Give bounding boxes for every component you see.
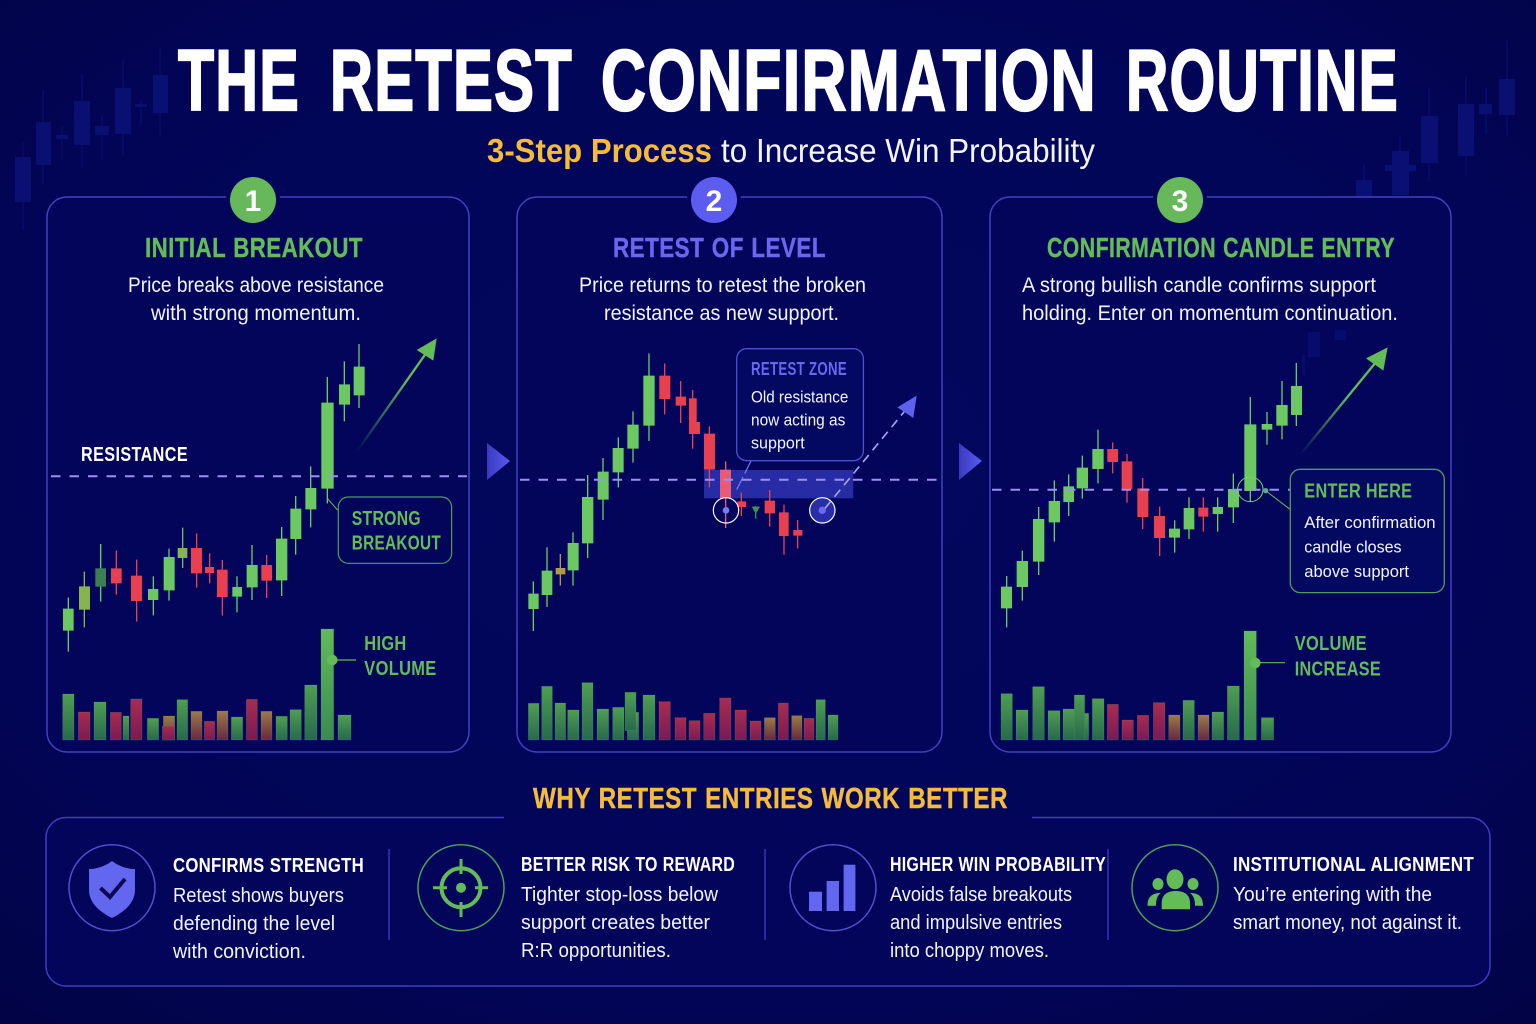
panel: step 1 initial breakout (47, 173, 469, 752)
benefit: institutional alignment: INSTITUTIONAL ALIGNMENT (1233, 854, 1474, 876)
candlestick chart (63, 344, 365, 652)
callout: strong breakout: STRONG (352, 508, 421, 530)
background candles right (1356, 41, 1515, 220)
callout: retest zone (736, 349, 863, 491)
badge 1 (226, 173, 280, 227)
volume bars (63, 629, 351, 740)
arrow: step 2 to 3 (959, 443, 982, 480)
high volume marker: HIGH (364, 633, 407, 655)
high volume marker (327, 633, 437, 680)
benefit: confirms strength (172, 855, 364, 963)
badge 1: 1 (245, 185, 261, 218)
description: with strong momentum. (150, 302, 361, 325)
arrow: up (357, 338, 437, 452)
high volume marker: VOLUME (364, 658, 437, 680)
panel: why retest entries work better (46, 783, 1490, 986)
support line (992, 489, 1290, 491)
volume bars (528, 683, 838, 740)
callout: enter here (1290, 469, 1444, 593)
callout: enter here: After confirmation (1304, 514, 1436, 532)
benefit: confirms strength: defending the level (173, 913, 335, 935)
callout: enter here: ENTER HERE (1304, 480, 1412, 502)
heading: INITIAL BREAKOUT (145, 232, 363, 263)
volume increase marker (1250, 633, 1381, 680)
benefit: institutional alignment: You’re entering with the (1233, 884, 1432, 906)
description: Price breaks above resistance (128, 274, 384, 297)
badge 3: 3 (1172, 185, 1188, 218)
callout: retest zone: Old resistance (751, 389, 848, 407)
arrow: up (1300, 347, 1388, 455)
benefit: higher win probability: into choppy moves. (890, 940, 1049, 962)
badge 2: 2 (706, 185, 722, 218)
arrow: dashed projection (825, 396, 917, 508)
badge 3 (1153, 173, 1207, 227)
candlestick chart (1001, 363, 1302, 627)
description: Price returns to retest the broken (579, 274, 866, 297)
resistance line (51, 475, 467, 477)
panel: step 3 confirmation candle entry (990, 173, 1451, 752)
divider lines (389, 849, 1108, 940)
callout: strong breakout (327, 497, 452, 563)
resistance label: RESISTANCE (81, 444, 188, 466)
retest markers (713, 498, 835, 523)
icon: shield (69, 845, 155, 931)
volume bars (1001, 631, 1274, 740)
badge 2 (687, 173, 741, 227)
icon: people (1132, 845, 1218, 931)
benefit: higher win probability: and impulsive entries (890, 912, 1062, 934)
title: RETEST (330, 33, 573, 129)
retest zone band (704, 470, 853, 498)
benefit: confirms strength: with conviction. (172, 941, 306, 963)
benefit: higher win probability: Avoids false breakouts (890, 884, 1072, 906)
callout: enter here: candle closes (1304, 539, 1402, 557)
benefit: confirms strength: CONFIRMS STRENGTH (173, 855, 364, 877)
benefit: institutional alignment (1233, 854, 1474, 934)
entry marker (1238, 477, 1290, 509)
title: CONFIRMATION (601, 33, 1097, 129)
subtitle: to Increase Win Probability (721, 132, 1095, 169)
volume increase marker: INCREASE (1295, 658, 1381, 680)
callout: retest zone: support (751, 434, 805, 452)
description (128, 274, 384, 325)
benefit: institutional alignment: smart money, not against it. (1233, 912, 1462, 934)
benefit: better risk to reward: BETTER RISK TO REWARD (521, 854, 735, 876)
panel: step 2 retest of level (517, 173, 942, 752)
callout: retest zone: RETEST ZONE (751, 359, 847, 379)
section heading: WHY RETEST ENTRIES WORK BETTER (533, 783, 1008, 815)
volume increase marker: VOLUME (1295, 633, 1367, 655)
icon: bar chart (790, 845, 876, 931)
benefit: higher win probability: HIGHER WIN PROBABILITY (890, 854, 1106, 876)
callout: strong breakout: BREAKOUT (352, 532, 441, 554)
title (178, 33, 1399, 129)
arrow: step 1 to 2 (487, 443, 510, 480)
candlestick chart (528, 353, 802, 631)
benefit: better risk to reward (521, 854, 735, 962)
description: A strong bullish candle confirms support (1022, 274, 1376, 297)
description: holding. Enter on momentum continuation. (1022, 302, 1398, 325)
benefit: better risk to reward: support creates better (521, 912, 710, 934)
description: resistance as new support. (604, 302, 839, 325)
description (579, 274, 866, 325)
subtitle (487, 132, 1095, 169)
title: ROUTINE (1126, 33, 1399, 129)
heading: RETEST OF LEVEL (613, 232, 826, 263)
benefit: better risk to reward: R:R opportunities. (521, 940, 671, 962)
callout: enter here: above support (1304, 563, 1409, 581)
title: THE (178, 33, 300, 129)
benefit: better risk to reward: Tighter stop-loss below (521, 884, 719, 906)
description (1022, 274, 1398, 325)
heading: CONFIRMATION CANDLE ENTRY (1047, 232, 1395, 263)
benefit: higher win probability (890, 854, 1106, 962)
faint background candles (1302, 330, 1346, 375)
support line (520, 479, 940, 481)
callout: retest zone: now acting as (751, 412, 845, 430)
subtitle: 3-Step Process (487, 132, 712, 169)
icon: target (418, 845, 504, 931)
benefit: confirms strength: Retest shows buyers (173, 885, 344, 907)
background candles left (15, 48, 168, 230)
